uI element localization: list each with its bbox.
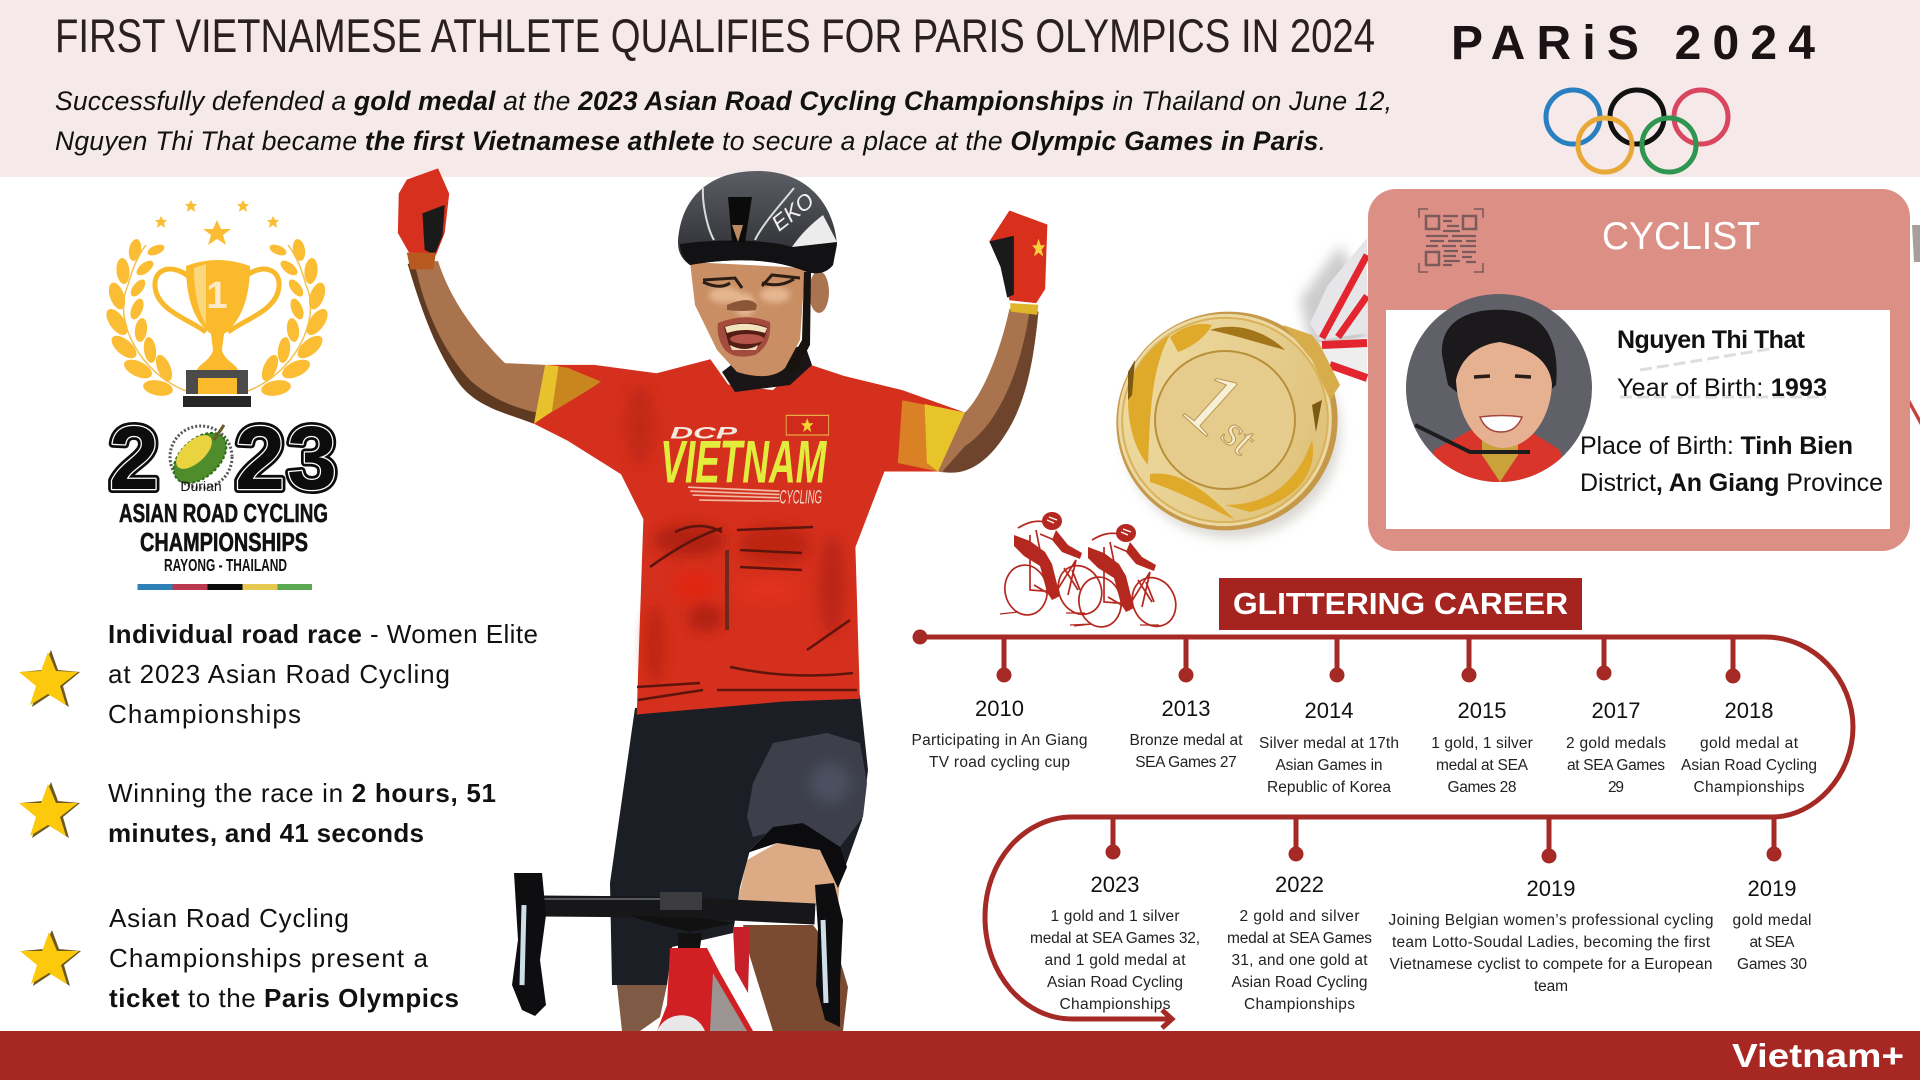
medal disc <box>1080 275 1374 567</box>
milestone 2014: Asian Games in <box>1276 757 1382 774</box>
Olympic rings <box>1546 90 1728 172</box>
milestone 2014: Silver medal at 17th <box>1259 735 1399 752</box>
left arm <box>408 261 545 424</box>
logo year: 2 <box>235 409 285 509</box>
milestone 2019 Lotto-Soudal <box>1388 817 1714 995</box>
milestone 2022 <box>1227 817 1372 1013</box>
subtitle line 2: Nguyen Thi That became the first Vietnamese athlete to secure a place at the Olympic Games in Paris. <box>55 126 1326 156</box>
milestone 2023: and 1 gold medal at <box>1044 952 1186 969</box>
mouth <box>718 317 770 357</box>
milestone 2019 SEA Games: gold medal <box>1732 912 1812 929</box>
CYCLING jersey lettering: CYCLING <box>780 486 822 508</box>
left brake hood <box>512 873 546 1016</box>
highlight text 1: Individual road race - Women Elite <box>108 619 538 649</box>
milestone 2023 <box>1030 817 1200 1013</box>
helmet white panel <box>792 215 837 247</box>
jersey folds <box>637 526 857 700</box>
inner disc <box>1155 351 1295 489</box>
milestone 2023: 2023 <box>1091 872 1139 897</box>
milestone 2015: Games 28 <box>1448 779 1516 796</box>
milestone 2022: medal at SEA Games <box>1227 930 1372 947</box>
trophy cup: 1 <box>206 275 228 317</box>
medal inscription: st <box>1212 408 1267 464</box>
2023 Asian Road Cycling Championships logo <box>109 409 337 590</box>
face <box>690 262 805 376</box>
highlight text 3: ticket to the Paris Olympics <box>109 983 459 1013</box>
highlight text 3: Asian Road Cycling <box>109 903 349 933</box>
2023 Asian Road Cycling Championships logo: CHAMPIONSHIPS <box>140 527 308 557</box>
first rider <box>1000 512 1110 625</box>
timeline arrowhead <box>1162 1010 1172 1028</box>
milestone 2013: 2013 <box>1162 696 1210 721</box>
star bullet 2 <box>19 782 80 838</box>
place of birth <box>1580 432 1883 497</box>
right arm shading <box>942 312 1038 473</box>
highlight text 2: minutes, and 41 seconds <box>108 818 424 848</box>
brows and eyes <box>703 275 800 288</box>
milestone 2018 <box>1681 637 1817 796</box>
neck and collar <box>722 345 812 392</box>
helmet <box>678 171 837 273</box>
medal ornaments <box>1128 324 1322 520</box>
milestone 2022: Championships <box>1244 996 1355 1013</box>
ear <box>809 271 829 313</box>
ribbon <box>1310 238 1367 383</box>
milestone 2010 <box>912 637 1088 771</box>
highlight text 2: Winning the race in 2 hours, 51 <box>108 778 496 808</box>
milestone 2019 Lotto-Soudal: 2019 <box>1527 876 1575 901</box>
jersey <box>534 359 965 714</box>
legs <box>617 843 848 1031</box>
start dot <box>912 630 928 644</box>
2023 Asian Road Cycling Championships logo: RAYONG - THAILAND <box>164 555 287 575</box>
shorts band <box>747 823 847 888</box>
milestone 2019 SEA Games: at SEA <box>1750 934 1795 951</box>
milestone 2018: 2018 <box>1725 698 1773 723</box>
left glove <box>398 168 449 269</box>
milestone 2023: medal at SEA Games 32, <box>1030 930 1200 947</box>
Paris 2024 wordmark: PARiS 2024 <box>1451 17 1815 70</box>
logo year: 3 <box>287 409 337 509</box>
milestone 2022: 2 gold and silver <box>1240 908 1360 925</box>
milestone 2022: 2022 <box>1275 872 1324 897</box>
helmet strap <box>785 272 811 372</box>
highlights list <box>19 619 538 1013</box>
logo year: 2 <box>109 409 159 509</box>
year of birth: Year of Birth: 1993 <box>1617 374 1827 402</box>
second rider <box>1074 524 1184 637</box>
trophy with laurel wreath <box>102 200 332 407</box>
left shin <box>617 985 667 1031</box>
durian emblem <box>164 423 236 494</box>
jersey soft shading <box>625 385 845 685</box>
milestone 2019 Lotto-Soudal: team Lotto-Soudal Ladies, becoming the first <box>1392 934 1711 951</box>
logo year <box>109 409 337 509</box>
milestone 2019 SEA Games: Games 30 <box>1737 956 1807 973</box>
portrait <box>1406 294 1592 482</box>
star bullet 1 <box>19 650 80 707</box>
cyclist ID card <box>1368 189 1910 551</box>
handlebar bar <box>540 906 815 914</box>
milestone 2018: gold medal at <box>1700 735 1799 752</box>
right shin <box>743 925 848 1031</box>
medal inscription <box>1164 351 1288 477</box>
milestone 2017 <box>1566 637 1666 796</box>
milestone 2015: 1 gold, 1 silver <box>1431 735 1533 752</box>
Vietnam+ logo: Vietnam+ <box>1732 1037 1904 1074</box>
left arm shading <box>408 264 536 424</box>
ribbon behind card right edge <box>1909 225 1920 425</box>
logo colour bar <box>138 584 312 590</box>
milestone 2018: Asian Road Cycling <box>1681 757 1817 774</box>
ribbon shadow <box>1300 245 1368 350</box>
milestone 2015 <box>1431 637 1533 796</box>
footer band <box>0 1031 1920 1080</box>
helmet band <box>680 240 837 273</box>
sponsor mark: DCP <box>670 424 739 443</box>
logo year: 2 <box>109 409 159 509</box>
medal shadow <box>1124 326 1340 538</box>
right glove <box>989 211 1047 315</box>
arms and gloves <box>398 168 1047 473</box>
milestone 2019 Lotto-Soudal: team <box>1534 978 1568 995</box>
shorts <box>610 695 868 985</box>
highlight text 1: at 2023 Asian Road Cycling <box>108 659 450 689</box>
milestone 2014: Republic of Korea <box>1267 779 1391 796</box>
timeline path <box>920 637 1853 1019</box>
highlight text 1: Championships <box>108 699 301 729</box>
logo year: 3 <box>287 409 337 509</box>
milestone 2023: Championships <box>1060 996 1171 1013</box>
milestone 2014: 2014 <box>1305 698 1353 723</box>
QR code icon <box>1419 209 1483 272</box>
cyclists sketch icon <box>1000 512 1184 637</box>
header band <box>0 0 1920 177</box>
highlight text 1 <box>108 619 538 729</box>
helmet vent <box>728 197 752 242</box>
name: Nguyen Thi That <box>1617 326 1806 354</box>
right arm <box>938 309 1038 473</box>
cyclist illustration <box>398 168 1047 1031</box>
milestone 2010: Participating in An Giang <box>912 732 1088 749</box>
face highlight <box>709 287 790 317</box>
medal inscription: 1 <box>1164 351 1263 455</box>
milestone 2019 Lotto-Soudal: Joining Belgian women’s professional cycling <box>1388 912 1714 929</box>
highlight text 3 <box>109 903 459 1013</box>
glittering career heading: GLITTERING CAREER <box>1233 586 1568 621</box>
milestone 2019 SEA Games <box>1732 817 1812 973</box>
bike frame <box>657 927 753 1031</box>
milestone 2017: 29 <box>1608 779 1624 796</box>
helmet lines <box>703 188 794 240</box>
milestone 2010: TV road cycling cup <box>929 754 1070 771</box>
logo year: 3 <box>287 409 337 509</box>
laurel wreath <box>102 238 189 398</box>
stem <box>660 892 702 910</box>
milestone 2022: Asian Road Cycling <box>1232 974 1368 991</box>
logo wording: ASIAN ROAD CYCLING <box>119 498 328 528</box>
right knee <box>738 843 840 905</box>
stars above trophy <box>155 200 279 245</box>
milestone 2015: medal at SEA <box>1436 757 1529 774</box>
milestone 2023: Asian Road Cycling <box>1047 974 1183 991</box>
milestone 2014 <box>1259 637 1399 796</box>
place of birth: District, An Giang Province <box>1580 469 1883 497</box>
milestone 2022: 31, and one gold at <box>1232 952 1368 969</box>
milestone 2018: Championships <box>1694 779 1805 796</box>
title: FIRST VIETNAMESE ATHLETE QUALIFIES FOR PARIS OLYMPICS IN 2024 <box>55 9 1375 62</box>
right brake hood <box>815 883 843 1027</box>
place of birth: Place of Birth: Tinh Bien <box>1580 432 1853 460</box>
career timeline <box>912 630 1853 1028</box>
milestone 2017: 2 gold medals <box>1566 735 1666 752</box>
milestone 2010: 2010 <box>975 696 1024 721</box>
milestone 2017: 2017 <box>1592 698 1640 723</box>
glittering career heading <box>1219 578 1582 630</box>
highlight text 2 <box>108 778 496 848</box>
subtitle line 1: Successfully defended a gold medal at the 2023 Asian Road Cycling Championships in Thailand on June 12, <box>55 86 1392 116</box>
logo year: 2 <box>235 409 285 509</box>
milestone 2019 SEA Games: 2019 <box>1748 876 1796 901</box>
thigh panel <box>747 733 867 847</box>
logo year: 2 <box>109 409 159 509</box>
star bullet 3 <box>20 930 81 986</box>
medal loop <box>1283 325 1340 400</box>
durian emblem: Durian <box>180 478 222 494</box>
faint dashed lines <box>1620 348 1826 397</box>
milestone 2013: Bronze medal at <box>1130 732 1243 749</box>
card heading: CYCLIST <box>1602 215 1760 258</box>
milestone 2013 <box>1130 637 1243 771</box>
milestone 2015: 2015 <box>1458 698 1506 723</box>
chest flag <box>786 415 829 435</box>
head <box>678 171 837 392</box>
milestone 2023: 1 gold and 1 silver <box>1050 908 1180 925</box>
logo year: 2 <box>235 409 285 509</box>
sleeve cuffs <box>534 365 965 508</box>
milestone 2017: at SEA Games <box>1567 757 1665 774</box>
highlight text 3: Championships present a <box>109 943 429 973</box>
VIETNAM jersey lettering: VIETNAM <box>660 427 827 496</box>
milestone 2019 Lotto-Soudal: Vietnamese cyclist to compete for a European <box>1390 956 1712 973</box>
trophy cup <box>155 260 279 407</box>
milestone 2013: SEA Games 27 <box>1135 754 1237 771</box>
handlebar and bike <box>512 873 843 1031</box>
helmet brand: EKO <box>767 188 819 236</box>
medal with ribbon <box>1080 238 1374 567</box>
nose shadow <box>727 300 757 311</box>
